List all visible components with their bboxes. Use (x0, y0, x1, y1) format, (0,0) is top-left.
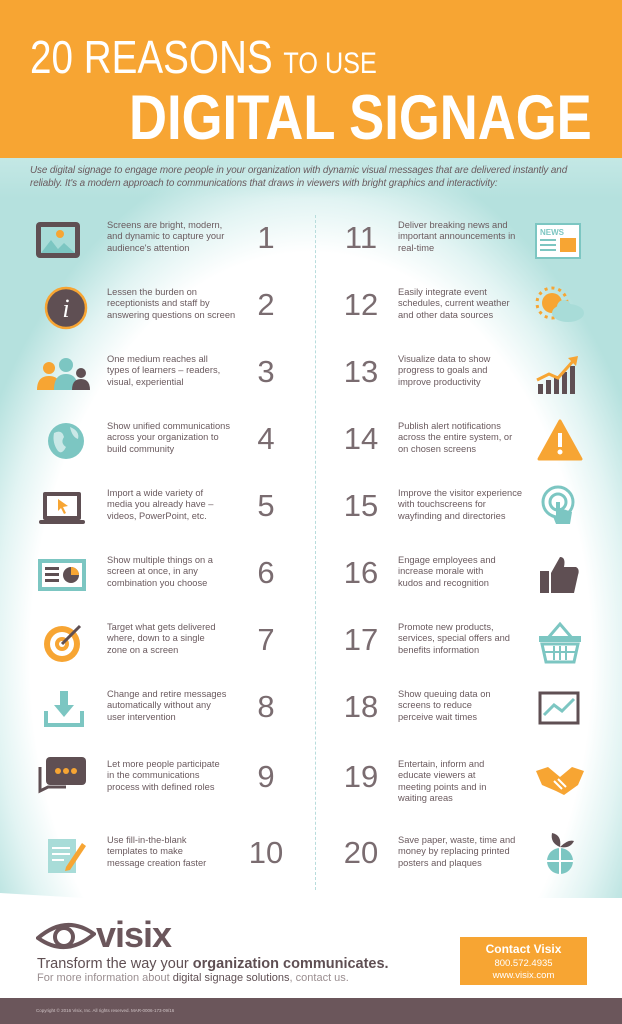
reason 17 (344, 622, 581, 664)
icon: note with pencil (48, 839, 86, 873)
reason 18: Show queuing data on screens to reduce perceive wait times (398, 689, 491, 722)
icon: basket (539, 622, 581, 664)
reason 14 (344, 419, 583, 460)
icon: touch (542, 486, 574, 524)
reason 8: Change and retire messages automatically without any user intervention (107, 689, 226, 722)
reason 17: Promote new products, services, special offers and benefits information (398, 622, 510, 655)
reason 12 (344, 286, 584, 322)
icon: target (44, 625, 81, 662)
reason 16 (344, 555, 579, 593)
reason 8: 8 (257, 689, 275, 724)
reason 20: 20 (344, 835, 378, 870)
sub tagline: For more information about digital signage solutions, contact us. (37, 972, 349, 984)
reason 5 (39, 488, 275, 524)
header (0, 0, 622, 158)
reason 14: 14 (344, 421, 378, 456)
reason 3 (37, 354, 275, 390)
tagline: Transform the way your organization communicates. (37, 956, 389, 972)
icon: alert (538, 419, 583, 460)
reason 6 (38, 555, 275, 591)
reason 9 (38, 757, 275, 794)
reason 6: 6 (257, 555, 275, 590)
reason 2 (44, 286, 275, 330)
reason 11 (345, 220, 581, 259)
reason 17: 17 (344, 622, 378, 657)
reason 19: 19 (344, 759, 378, 794)
reason 9: Let more people participate in the communications process with defined roles (107, 759, 220, 792)
reason 4: 4 (257, 421, 275, 456)
reason 11: Deliver breaking news and important announcements in real-time (398, 220, 515, 253)
icon: line chart (538, 692, 580, 724)
icon: weather (536, 286, 584, 322)
logo: visix (36, 918, 186, 954)
reason 2: 2 (257, 287, 275, 322)
reason 5: 5 (257, 488, 275, 523)
icon: news (535, 223, 581, 259)
reason 1: Screens are bright, modern, and dynamic to capture your audience's attention (107, 220, 224, 253)
intro text: Use digital signage to engage more people in your organization with dynamic visual messages that are delivered instantly and reliably. It's a modern approach to communications that draws in viewers with bright graphics and interactivity: (30, 165, 567, 189)
icon: people (37, 358, 90, 390)
reason 15: 15 (344, 488, 378, 523)
reason 3: One medium reaches all types of learners – readers, visual, experiential (107, 354, 220, 387)
background (0, 158, 622, 898)
reason 6: Show multiple things on a screen at once, in any combination you choose (107, 555, 213, 588)
reason 1 (36, 220, 275, 258)
reason 2: Lessen the burden on receptionists and staff by answering questions on screen (107, 287, 235, 320)
reason 4: Show unified communications across your organization to build community (107, 421, 230, 454)
icon: news: NEWS (540, 228, 565, 237)
contact box: www.visix.com (493, 970, 554, 981)
reason 1: 1 (257, 220, 275, 255)
reason 7: Target what gets delivered where, down to a single zone on a screen (107, 622, 216, 655)
title line 2: DIGITAL SIGNAGE (129, 83, 592, 153)
reason 8 (44, 689, 275, 727)
contact box (460, 937, 587, 985)
reason 15 (344, 486, 574, 524)
icon: info: i (62, 294, 70, 323)
reason 18 (344, 689, 580, 724)
icon: screen (36, 222, 80, 258)
icon: eco globe (536, 829, 584, 877)
copyright bar: Copyright © 2016 Visix, Inc. All rights reserved. MAR-0006-173-09/16 (36, 1008, 174, 1013)
icon: globe (48, 423, 84, 459)
reason 13: 13 (344, 354, 378, 389)
reason 11: 11 (345, 220, 377, 255)
icon: info (44, 286, 88, 330)
reason 10: Use fill-in-the-blank templates to make message creation faster (107, 835, 206, 868)
reason 19: Entertain, inform and educate viewers at meeting points and in waiting areas (398, 759, 486, 803)
icon: growth chart (536, 356, 578, 394)
reason 4 (48, 421, 275, 459)
reason 19 (344, 759, 584, 803)
reason 16: 16 (344, 555, 378, 590)
icon: download (44, 691, 84, 727)
reason 10 (48, 835, 283, 873)
reason 13 (344, 354, 578, 394)
reason 7: 7 (257, 622, 275, 657)
icon: thumbs up (540, 557, 579, 593)
footer (0, 893, 71, 898)
reason 12: Easily integrate event schedules, current weather and other data sources (398, 287, 510, 320)
reason 3: 3 (257, 354, 275, 389)
title line 1: 20 REASONS TO USE (30, 31, 377, 83)
icon: chat bubble (38, 757, 86, 794)
reason 10: 10 (249, 835, 283, 870)
reason 13: Visualize data to show progress to goals and improve productivity (398, 354, 490, 387)
reason 7 (44, 622, 275, 662)
reason 20 (344, 833, 574, 874)
reason 15: Improve the visitor experience with touchscreens for wayfinding and directories (398, 488, 522, 521)
icon: multi-zone screen (38, 559, 86, 591)
reason 14: Publish alert notifications across the entire system, or on chosen screens (398, 421, 512, 454)
contact box: 800.572.4935 (494, 958, 553, 969)
reason 5: Import a wide variety of media you already have – videos, PowerPoint, etc. (107, 488, 213, 521)
contact box: Contact Visix (486, 942, 561, 956)
reason 16: Engage employees and increase morale with kudos and recognition (398, 555, 496, 588)
reason 18: 18 (344, 689, 378, 724)
copyright bar (0, 998, 622, 1024)
reason 9: 9 (257, 759, 275, 794)
reason 12: 12 (344, 287, 378, 322)
icon: handshake (536, 767, 584, 795)
icon: laptop (39, 492, 85, 524)
reason 20: Save paper, waste, time and money by replacing printed posters and plaques (398, 835, 515, 868)
logo: visix: visix (96, 914, 171, 955)
